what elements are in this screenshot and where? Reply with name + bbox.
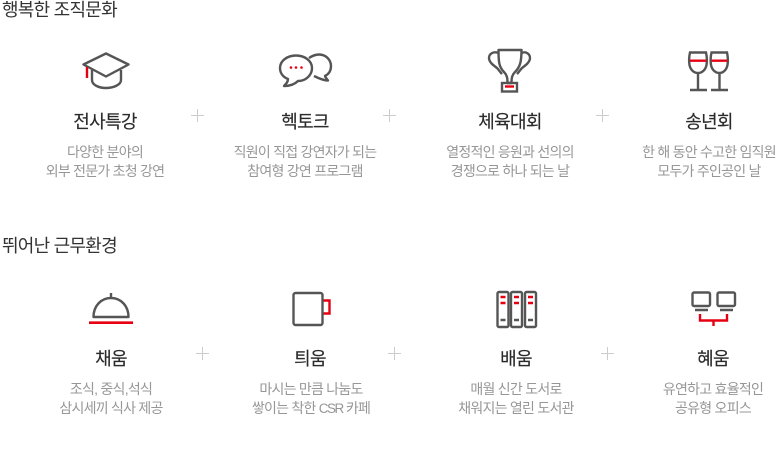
description: tieum [252, 381, 370, 416]
description: tieum: 마시는 만큼 나눔도 [259, 381, 363, 397]
icon: graduation cap [84, 54, 128, 88]
description: sports day: 열정적인 응원과 선의의 [446, 144, 574, 160]
description: year-end party [642, 144, 776, 178]
heading: happy culture: 행복한 조직문화 [2, 0, 117, 20]
description: chaeum: 조식, 중식,석식 [70, 381, 152, 397]
title: year-end party: 송년회 [685, 112, 733, 132]
description: company lecture: 외부 전문가 초청 강연 [46, 162, 164, 178]
description: chaeum [59, 381, 163, 416]
description: hyeum: 유연하고 효율적인 [663, 381, 763, 397]
description: chaeum: 삼시세끼 식사 제공 [59, 400, 163, 416]
description: baeum [458, 381, 574, 416]
icon: mug [294, 293, 330, 325]
description: year-end party: 한 해 동안 수고한 임직원 [642, 144, 776, 160]
description: talk [234, 144, 376, 178]
description: sports day [446, 144, 574, 178]
title: talk: 헥토크 [281, 112, 329, 132]
description: tieum: 쌓이는 착한 CSR 카페 [252, 400, 370, 416]
icon: cloche [89, 293, 133, 323]
title: sports day: 체육대회 [478, 112, 542, 132]
icon: bookshelf [498, 292, 536, 327]
title: tieum: 틔움 [294, 349, 326, 369]
description: talk: 직원이 직접 강연자가 되는 [234, 144, 376, 160]
icon: trophy [489, 50, 530, 92]
icon: shared monitors [692, 292, 735, 326]
description: baeum: 매월 신간 도서로 [470, 381, 562, 397]
title: chaeum: 채움 [95, 349, 127, 369]
title: company lecture: 전사특강 [73, 112, 137, 132]
description: talk: 참여형 강연 프로그램 [247, 162, 363, 178]
title: baeum: 배움 [500, 349, 532, 369]
icon: wine glasses [689, 52, 728, 90]
description: company lecture [46, 144, 164, 178]
icon: speech bubbles [280, 54, 331, 86]
description: sports day: 경쟁으로 하나 되는 날 [451, 162, 569, 178]
description: baeum: 채워지는 열린 도서관 [458, 400, 574, 416]
description: hyeum: 공유형 오피스 [675, 400, 751, 416]
description: hyeum [663, 381, 763, 416]
description: company lecture: 다양한 분야의 [67, 144, 143, 160]
heading: work environment: 뛰어난 근무환경 [2, 236, 117, 256]
description: year-end party: 모두가 주인공인 날 [657, 162, 761, 178]
plus signs [191, 109, 614, 360]
title: hyeum: 혜움 [697, 349, 729, 369]
